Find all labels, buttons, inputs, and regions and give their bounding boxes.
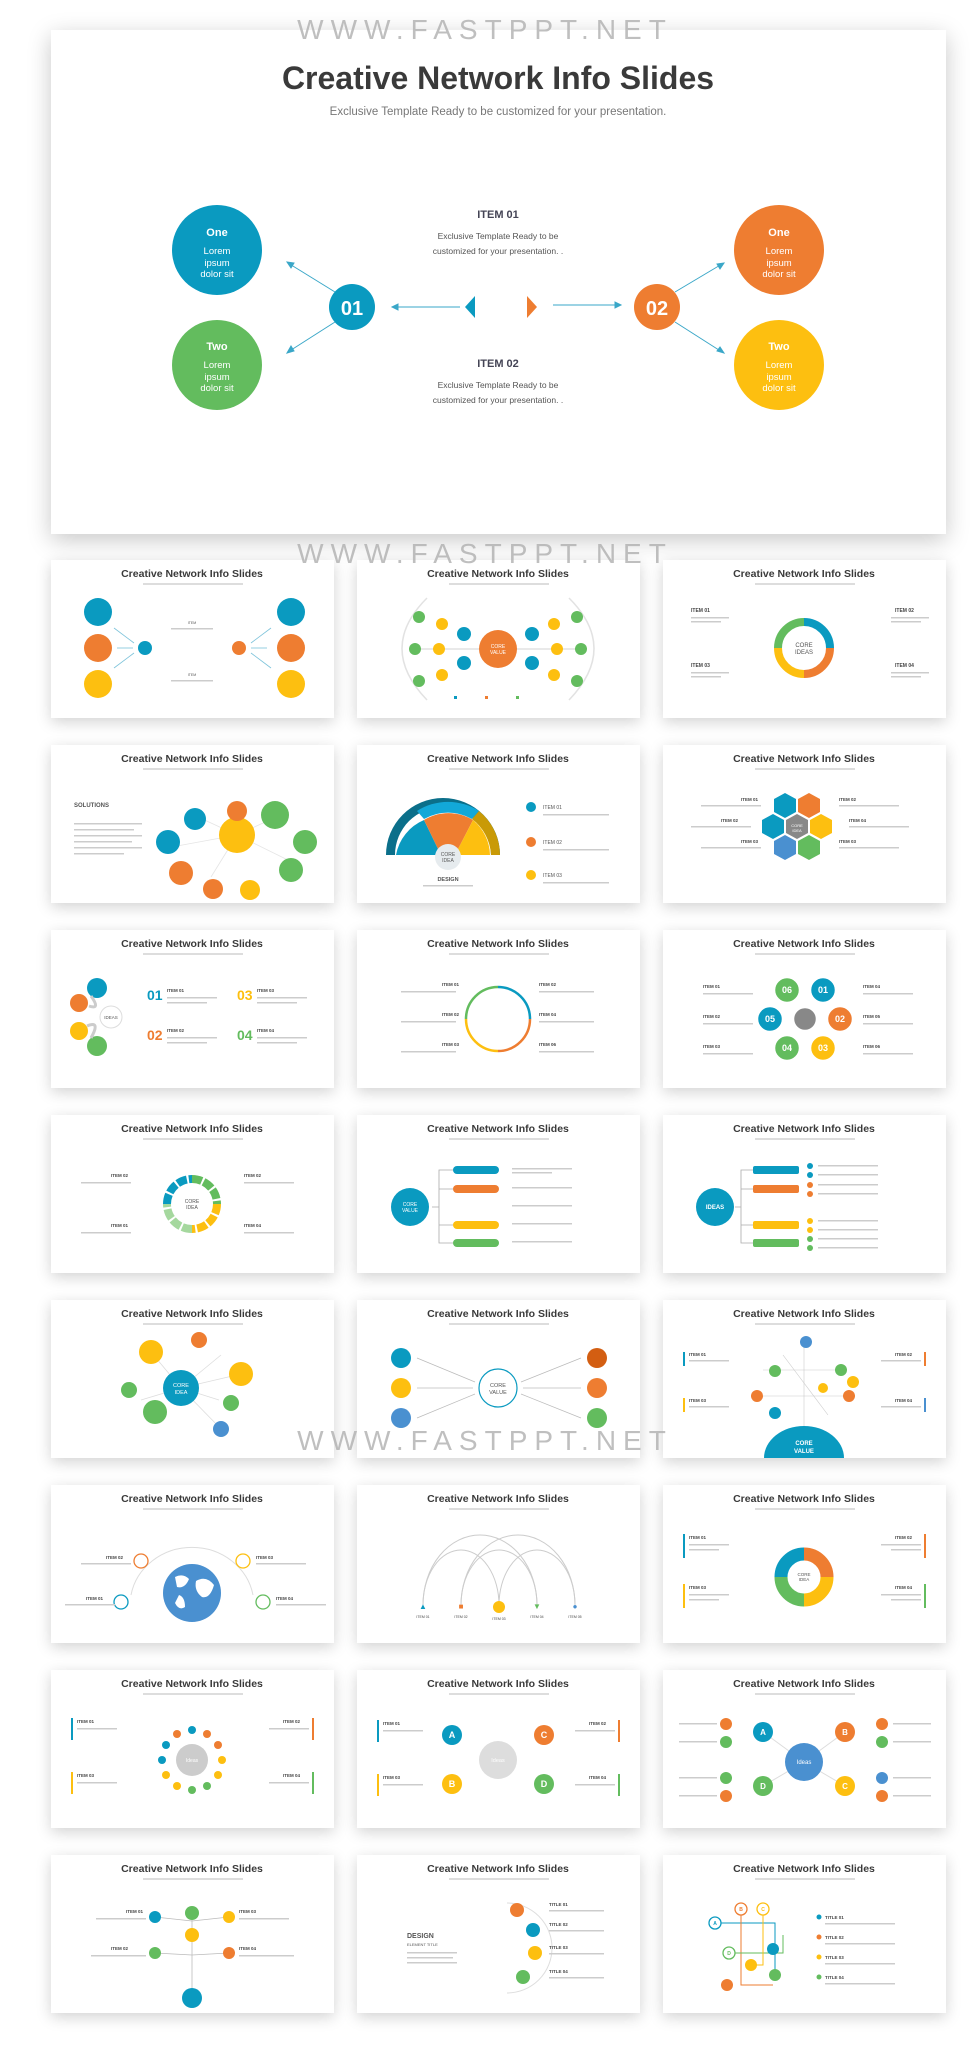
- watermark top: WWW.FASTPPT.NET: [297, 14, 673, 45]
- thumbnail 20: D: [541, 1779, 548, 1789]
- circle: One blue: ipsum: [204, 258, 230, 269]
- thumbnail 7: 02: [147, 1027, 163, 1043]
- thumbnail 1: Creative Network Info Slides: [121, 568, 263, 580]
- thumbnail 23: TITLE 03: [549, 1945, 568, 1950]
- circle: One orange: dolor sit: [762, 269, 796, 280]
- thumbnail 23: ELEMENT TITLE: [407, 1942, 438, 1947]
- thumbnail 19: ITEM 02: [283, 1719, 301, 1724]
- thumbnail 7: ITEM 03: [257, 988, 275, 993]
- thumbnail 12: Creative Network Info Slides: [733, 1123, 875, 1135]
- thumbnail 21: C: [842, 1782, 848, 1791]
- thumbnail 24: Creative Network Info Slides: [733, 1863, 875, 1875]
- thumbnail 13: Creative Network Info Slides: [121, 1308, 263, 1320]
- thumbnail 17: ITEM 01: [416, 1615, 430, 1619]
- circle: Two yellow: Two: [768, 341, 790, 353]
- thumbnail 22: Creative Network Info Slides: [121, 1863, 263, 1875]
- thumbnail 8: [357, 930, 640, 1088]
- thumbnail 8: ITEM 01: [442, 982, 460, 987]
- thumbnail 13: [51, 1300, 334, 1458]
- thumbnail 8: Creative Network Info Slides: [427, 938, 569, 950]
- circle: One orange: [734, 205, 824, 295]
- thumbnail 1: ITEM: [188, 673, 196, 677]
- thumbnail 11: Creative Network Info Slides: [427, 1123, 569, 1135]
- thumbnail 16: ITEM 01: [86, 1596, 104, 1601]
- thumbnail 12: [663, 1115, 946, 1273]
- circle: One blue: Lorem: [204, 246, 231, 257]
- thumbnail 9: ITEM 06: [863, 1044, 881, 1049]
- thumbnail 4: [51, 745, 334, 903]
- thumbnail 16: [51, 1485, 334, 1643]
- circle: Two green: dolor sit: [200, 383, 234, 394]
- watermark lower: WWW.FASTPPT.NET: [297, 1425, 673, 1456]
- thumbnail 8: ITEM 06: [539, 1042, 557, 1047]
- thumbnail 21: [663, 1670, 946, 1828]
- circle: Two yellow: ipsum: [766, 372, 792, 383]
- thumbnail 19: Creative Network Info Slides: [121, 1678, 263, 1690]
- thumbnail 8: ITEM 02: [539, 982, 557, 987]
- thumbnail 23: TITLE 04: [549, 1969, 568, 1974]
- thumbnail 17: ITEM 02: [454, 1615, 468, 1619]
- thumbnail 20: B: [449, 1779, 456, 1789]
- thumbnail 7: 03: [237, 987, 253, 1003]
- thumbnail 13: CORE: [173, 1383, 189, 1389]
- thumbnail 8: ITEM 03: [442, 1042, 460, 1047]
- thumbnail 9: ITEM 05: [863, 1014, 881, 1019]
- thumbnail 6: ITEM 02: [721, 818, 739, 823]
- thumbnail 17: ●: [573, 1602, 578, 1611]
- thumbnail 24: [663, 1855, 946, 2013]
- thumbnail 15: ITEM 02: [895, 1352, 913, 1357]
- thumbnail 2: Creative Network Info Slides: [427, 568, 569, 580]
- thumbnail 5: CORE: [441, 852, 456, 858]
- thumbnail 16: Creative Network Info Slides: [121, 1493, 263, 1505]
- thumbnail 20: ITEM 03: [383, 1775, 401, 1780]
- circle: One blue: dolor sit: [200, 269, 234, 280]
- text: item 02: ITEM 02: [477, 358, 519, 370]
- thumbnail 22: ITEM 01: [126, 1909, 144, 1914]
- thumbnail 5: ITEM 02: [543, 840, 562, 846]
- node 02: [634, 284, 680, 330]
- thumbnail 1: [51, 560, 334, 718]
- thumbnail 15: CORE: [795, 1441, 813, 1447]
- thumbnail 3: IDEAS: [795, 650, 813, 656]
- text: item 01: [433, 209, 563, 256]
- thumbnail 24: D: [727, 1951, 731, 1957]
- thumbnail 18: ITEM 02: [895, 1535, 913, 1540]
- thumbnail 10: ITEM 02: [244, 1173, 262, 1178]
- text: item 01: ITEM 01: [477, 209, 519, 221]
- thumbnail 16: ITEM 02: [106, 1555, 124, 1560]
- thumbnail 13: IDEA: [175, 1390, 188, 1396]
- thumbnail 19: ITEM 03: [77, 1773, 95, 1778]
- thumbnail 9: 05: [765, 1014, 775, 1024]
- arrows: [287, 262, 724, 353]
- thumbnail 20: C: [541, 1730, 548, 1740]
- thumbnail 5: IDEA: [442, 858, 454, 864]
- thumbnail 9: 02: [835, 1014, 845, 1024]
- thumbnail 23: TITLE 01: [549, 1902, 568, 1907]
- circle: Two green: Two: [206, 341, 228, 353]
- thumbnail 20: ITEM 02: [589, 1721, 607, 1726]
- thumbnail 17: ▲: [419, 1602, 427, 1611]
- thumbnail 11: [357, 1115, 640, 1273]
- thumbnail 9: ITEM 01: [703, 984, 721, 989]
- circle: One orange: Lorem: [766, 246, 793, 257]
- thumbnail 3: ITEM 03: [691, 663, 710, 669]
- thumbnail 9: ITEM 03: [703, 1044, 721, 1049]
- thumbnail 4: Creative Network Info Slides: [121, 753, 263, 765]
- thumbnail 7: IDEAS: [104, 1015, 118, 1020]
- thumbnail 10: IDEA: [186, 1205, 198, 1211]
- text: item 01: Exclusive Template Ready to be: [438, 231, 559, 241]
- thumbnail 20: Creative Network Info Slides: [427, 1678, 569, 1690]
- thumbnail 17: Creative Network Info Slides: [427, 1493, 569, 1505]
- thumbnail 15: VALUE: [794, 1449, 814, 1455]
- thumbnail 8: ITEM 04: [539, 1012, 557, 1017]
- thumbnail 5: ITEM 01: [543, 805, 562, 811]
- thumbnail 18: ITEM 01: [689, 1535, 707, 1540]
- circle: Two green: [172, 320, 262, 410]
- circle: One blue: [172, 205, 262, 295]
- thumbnail 15: ITEM 04: [895, 1398, 913, 1403]
- thumbnail 15: [663, 1300, 946, 1458]
- node 01: 01: [341, 298, 363, 320]
- thumbnail 19: ITEM 01: [77, 1719, 95, 1724]
- thumbnail 21: B: [842, 1728, 848, 1737]
- thumbnail 9: 01: [818, 985, 828, 995]
- thumbnail 17: ITEM 03: [492, 1617, 506, 1621]
- node 02: 02: [646, 298, 668, 320]
- thumbnail 24: TITLE 04: [825, 1975, 844, 1980]
- thumbnail 3: ITEM 02: [895, 608, 914, 614]
- thumbnail 2: CORE: [491, 644, 506, 650]
- thumbnail 3: CORE: [795, 643, 813, 649]
- thumbnail 3: ITEM 04: [895, 663, 914, 669]
- thumbnail 24: C: [761, 1907, 765, 1913]
- circle: Two green: Lorem: [204, 360, 231, 371]
- thumbnail 24: B: [739, 1907, 743, 1913]
- thumbnail 19: ITEM 04: [283, 1773, 301, 1778]
- thumbnail 9: 04: [782, 1043, 792, 1053]
- thumbnail 16: ITEM 04: [276, 1596, 294, 1601]
- circle: Two yellow: Lorem: [766, 360, 793, 371]
- thumbnail 17: ITEM 04: [530, 1615, 544, 1619]
- thumbnail 14: [357, 1300, 640, 1458]
- thumbnail 20: A: [449, 1730, 456, 1740]
- thumbnail 21: Creative Network Info Slides: [733, 1678, 875, 1690]
- thumbnail 2: VALUE: [490, 650, 507, 656]
- thumbnail 5: DESIGN: [437, 877, 459, 883]
- triangles center: [465, 296, 537, 318]
- thumbnail 6: Creative Network Info Slides: [733, 753, 875, 765]
- thumbnail 14: Creative Network Info Slides: [427, 1308, 569, 1320]
- node 01: [329, 284, 375, 330]
- thumbnail 7: 04: [237, 1027, 253, 1043]
- thumbnail 18: CORE: [797, 1572, 811, 1577]
- text: item 02: Exclusive Template Ready to be: [438, 380, 559, 390]
- text: item 02: [433, 358, 563, 405]
- thumbnail 5: Creative Network Info Slides: [427, 753, 569, 765]
- thumbnail 1: ITEM: [188, 621, 196, 625]
- thumbnail 14: VALUE: [489, 1390, 507, 1396]
- thumbnail 10: Creative Network Info Slides: [121, 1123, 263, 1135]
- thumbnail 22: ITEM 04: [239, 1946, 257, 1951]
- text: item 02: customized for your presentation. .: [433, 395, 563, 405]
- thumbnail 15: ITEM 03: [689, 1398, 707, 1403]
- thumbnail 3: [663, 560, 946, 718]
- thumbnail 7: ITEM 01: [167, 988, 185, 993]
- thumbnail 7: Creative Network Info Slides: [121, 938, 263, 950]
- thumbnail 6: ITEM 01: [741, 797, 759, 802]
- thumbnail 23: [357, 1855, 640, 2013]
- thumbnail 5: [357, 745, 640, 903]
- text: item 01: customized for your presentation. .: [433, 246, 563, 256]
- thumbnail 14: CORE: [490, 1383, 506, 1389]
- thumbnail 18: ITEM 03: [689, 1585, 707, 1590]
- circle: Two yellow: dolor sit: [762, 383, 796, 394]
- thumbnail 24: TITLE 02: [825, 1935, 844, 1940]
- thumbnail 8: ITEM 02: [442, 1012, 460, 1017]
- thumbnail 6: ITEM 03: [741, 839, 759, 844]
- thumbnail 20: [357, 1670, 640, 1828]
- thumbnail 10: [51, 1115, 334, 1273]
- thumbnail 5: ITEM 03: [543, 873, 562, 879]
- thumbnail 6: [663, 745, 946, 903]
- thumbnail 10: ITEM 02: [111, 1173, 129, 1178]
- thumbnail 17: ▼: [533, 1602, 541, 1611]
- thumbnail 22: ITEM 02: [111, 1946, 129, 1951]
- thumbnail 7: ITEM 02: [167, 1028, 185, 1033]
- watermark middle: WWW.FASTPPT.NET: [297, 538, 673, 569]
- thumbnail 20: ITEM 01: [383, 1721, 401, 1726]
- thumbnail 23: DESIGN: [407, 1933, 434, 1940]
- thumbnail 4: SOLUTIONS: [74, 803, 109, 809]
- thumbnail 3: Creative Network Info Slides: [733, 568, 875, 580]
- thumbnail 24: A: [713, 1921, 717, 1927]
- thumbnail 6: CORE: [791, 823, 803, 828]
- thumbnail 18: [663, 1485, 946, 1643]
- thumbnail 6: ITEM 04: [849, 818, 867, 823]
- circle: Two yellow: [734, 320, 824, 410]
- thumbnail 9: 06: [782, 985, 792, 995]
- thumbnail 18: IDEA: [799, 1577, 809, 1582]
- thumbnail 7: ITEM 04: [257, 1028, 275, 1033]
- panel: main slide: [51, 30, 946, 534]
- thumbnail 23: TITLE 02: [549, 1922, 568, 1927]
- thumbnail 7: 01: [147, 987, 163, 1003]
- thumbnail 10: CORE: [185, 1199, 200, 1205]
- thumbnail 9: ITEM 04: [863, 984, 881, 989]
- thumbnail 19: [51, 1670, 334, 1828]
- thumbnail 23: Creative Network Info Slides: [427, 1863, 569, 1875]
- title: Creative Network Info Slides: [282, 60, 714, 96]
- thumbnail 18: Creative Network Info Slides: [733, 1493, 875, 1505]
- thumbnail 6: ITEM 03: [839, 839, 857, 844]
- thumbnail 17: ITEM 05: [568, 1615, 582, 1619]
- thumbnail 20: ITEM 04: [589, 1775, 607, 1780]
- thumbnail 22: ITEM 03: [239, 1909, 257, 1914]
- thumbnail 21: A: [760, 1728, 766, 1737]
- thumbnail 18: ITEM 04: [895, 1585, 913, 1590]
- thumbnail 21: Ideas: [797, 1760, 811, 1766]
- thumbnail 16: ITEM 03: [256, 1555, 274, 1560]
- thumbnail 12: IDEAS: [706, 1205, 724, 1211]
- thumbnail 10: ITEM 01: [111, 1223, 129, 1228]
- circle: One orange: ipsum: [766, 258, 792, 269]
- thumbnail 6: IDEA: [792, 828, 802, 833]
- thumbnail 9: 03: [818, 1043, 828, 1053]
- thumbnail 6: ITEM 02: [839, 797, 857, 802]
- circle: Two green: ipsum: [204, 372, 230, 383]
- thumbnail 19: Ideas: [186, 1758, 199, 1764]
- thumbnail 22: [51, 1855, 334, 2013]
- thumbnail 9: Creative Network Info Slides: [733, 938, 875, 950]
- thumbnail 17: [357, 1485, 640, 1643]
- thumbnail 24: TITLE 03: [825, 1955, 844, 1960]
- thumbnail 17: ■: [459, 1602, 464, 1611]
- thumbnail 11: CORE: [403, 1202, 418, 1208]
- circle: One blue: One: [206, 227, 228, 239]
- thumbnail 15: ITEM 01: [689, 1352, 707, 1357]
- thumbnail 7: [51, 930, 334, 1088]
- thumbnail 2: [357, 560, 640, 718]
- thumbnail 21: D: [760, 1782, 766, 1791]
- thumbnail 20: Ideas: [491, 1758, 505, 1764]
- circle: One orange: One: [768, 227, 790, 239]
- thumbnail 10: ITEM 04: [244, 1223, 262, 1228]
- thumbnail 3: ITEM 01: [691, 608, 710, 614]
- thumbnail 9: ITEM 02: [703, 1014, 721, 1019]
- thumbnail 24: TITLE 01: [825, 1915, 844, 1920]
- subtitle: Exclusive Template Ready to be customized for your presentation.: [330, 106, 666, 118]
- thumbnail 9: [663, 930, 946, 1088]
- thumbnail 15: Creative Network Info Slides: [733, 1308, 875, 1320]
- thumbnail 11: VALUE: [402, 1208, 419, 1214]
